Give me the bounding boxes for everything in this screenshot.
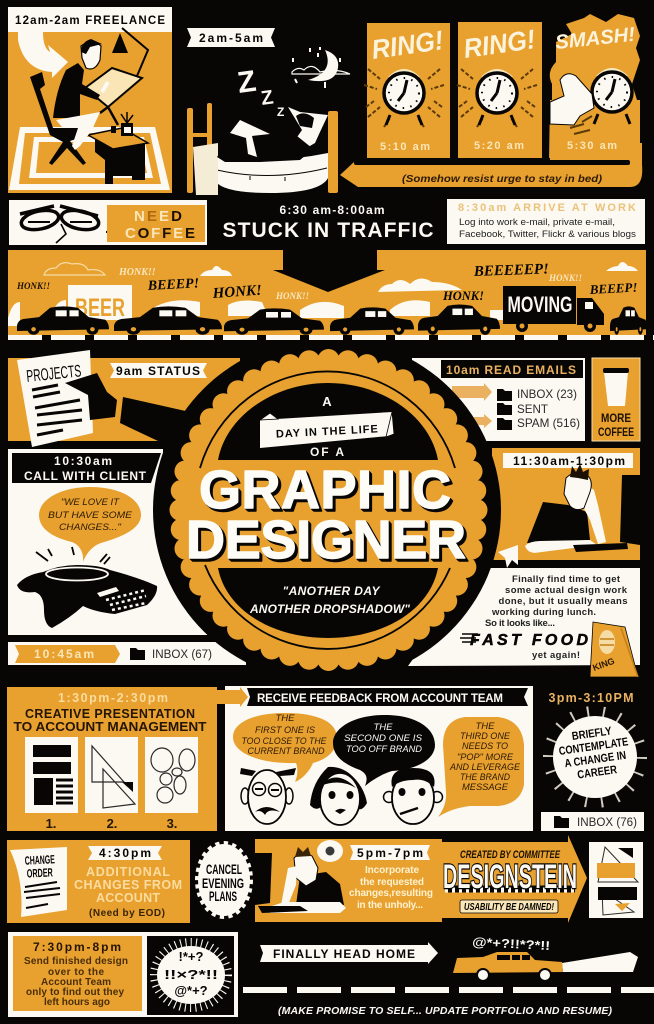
central badge (153, 338, 501, 682)
illustration: Zzz: Z (260, 86, 275, 110)
panel: need coffee: NEED (134, 208, 182, 225)
icon: alarm clock (457, 69, 537, 127)
icon: white up arrow (498, 545, 518, 568)
ribbon: day in the life: DAY IN THE LIFE (276, 423, 378, 441)
panel: traffic jam (8, 250, 647, 335)
icon: white flow arrow (18, 32, 68, 78)
panel: 1:30pm creative presentation: TO ACCOUNT MANAGEMENT (14, 720, 207, 734)
panel: 4:30pm additional changes: (Need by EOD) (89, 908, 165, 919)
bubble: first one: CURRENT BRAND (248, 746, 325, 757)
inbox list: INBOX (23) (517, 387, 577, 401)
illustration: car with headlight (453, 952, 638, 981)
option numbers: 3. (167, 816, 177, 831)
panel: inbox 76 (541, 812, 644, 831)
panel: 7:30pm send finished design: 7:30pm-8pm (33, 940, 121, 954)
panel: ring 5:20 am (457, 22, 542, 158)
text: fast food: FAST FOOD (470, 632, 588, 649)
honk sound words: HONK!! (118, 267, 156, 278)
tagline: ANOTHER DROPSHADOW" (249, 602, 410, 616)
text: incorporate changes: in the unholy... (357, 900, 423, 911)
arrows to folders (452, 383, 492, 428)
illustration: monitor (620, 475, 640, 545)
panel: 4:30pm additional changes: ADDITIONAL (86, 865, 170, 879)
panel: 7:30pm send finished design: Send finished design (24, 956, 128, 967)
speech bubble: client quote: BUT HAVE SOME (48, 510, 133, 521)
face: account man smoking (384, 768, 442, 824)
icon: change order paper (10, 847, 67, 917)
honk sound words: HONK! (442, 289, 484, 303)
illustration: Zzz: Z (277, 105, 284, 119)
panel: need coffee (9, 200, 207, 245)
honk sound words (16, 261, 638, 303)
burst: cancel evening plans (198, 844, 250, 916)
burst: cancel evening plans: CANCEL (206, 862, 242, 877)
honk sound words: HONK!! (16, 281, 50, 291)
panel: 4:30pm additional changes (7, 840, 190, 923)
bubble: first one: FIRST ONE IS (255, 725, 316, 736)
burst: contemplate career change (551, 714, 639, 800)
icon: hand and sleeve (65, 373, 190, 443)
title: of a: OF A (310, 445, 344, 459)
panel: 7:30pm send finished design: Account Team (41, 977, 111, 988)
panel: ring 5:10 am (364, 23, 450, 158)
illustration: moon and stars (292, 47, 350, 88)
panel: smash 5:30 am with arrow to bed (340, 14, 642, 187)
panel: 10:45am inbox: INBOX (67) (152, 649, 212, 661)
burst: cancel evening plans: EVENING (202, 876, 244, 891)
text: lunch description: So it looks like... (485, 618, 555, 629)
banner: finally head home (260, 942, 438, 964)
panel: ring 5:20 am: RING! (462, 24, 537, 64)
illustration: tired designer (258, 847, 346, 913)
illustration: monitor (255, 853, 272, 905)
honk sound words: HONK! (211, 283, 262, 302)
black arrow (273, 250, 385, 292)
bubble: second one: SECOND ONE IS (344, 733, 423, 744)
panel: 5pm-7pm designstein arrow: CREATED BY COMMITTEE (460, 849, 560, 861)
label: 2am-5am banner (187, 28, 275, 47)
panel: ring 5:20 am: 5:20 am (474, 140, 524, 152)
panel: 8:30am arrive at work: Log into work e-mail, private e-mail, (459, 217, 615, 228)
panel: ring 5:10 am: 5:10 am (380, 141, 430, 153)
background cars and beer sign: BEER (75, 294, 125, 322)
panel: curse burst (147, 936, 234, 1015)
option numbers (46, 816, 177, 831)
heading banner: RECEIVE FEEDBACK FROM ACCOUNT TEAM (257, 693, 503, 705)
label: time: 11:30am-1:30pm (513, 454, 625, 468)
ribbon: day in the life (260, 412, 394, 448)
tagline: "ANOTHER DAY (282, 584, 380, 598)
text: lunch description: some actual design work (505, 585, 628, 596)
honk sound words: HONK!! (275, 291, 309, 301)
icon: tired eyes (20, 206, 116, 243)
arrow into banner (217, 687, 248, 707)
background cars and beer sign (8, 285, 505, 326)
label: 2am-5am banner: 2am-5am (199, 31, 263, 45)
bubble: third one: THE BRAND (460, 772, 510, 783)
heading: 3pm-3:10pm: 3pm-3:10PM (548, 691, 634, 705)
caption: make promise: (MAKE PROMISE TO SELF... UPDATE PORTFOLIO AND RESUME) (278, 1005, 612, 1017)
icon: alarm clock (364, 69, 444, 127)
panel: smash 5:30 am with arrow to bed: 5:30 am (567, 140, 617, 152)
burst: contemplate career change: CONTEMPLATE (558, 736, 629, 758)
bubble: third one: "POP" MORE (457, 752, 514, 763)
illustration: designer eating at desk (525, 464, 628, 553)
icon: coffee cup (603, 368, 629, 406)
burst: contemplate career change: CAREER (577, 764, 618, 782)
icon: smashing hand (550, 74, 594, 125)
honk sound words: HONK!! (548, 273, 582, 283)
icon: paper bag (590, 622, 638, 677)
inbox list (497, 387, 580, 430)
text: incorporate changes: the requested (360, 877, 424, 888)
option numbers: 2. (107, 816, 117, 831)
panel: need coffee: COFFEE (125, 225, 195, 242)
illustration: Zzz: Z (235, 65, 258, 100)
black lower panel (218, 568, 438, 638)
label: 9am status: 9am STATUS (116, 364, 200, 378)
text: lunch description: working during lunch. (491, 607, 596, 618)
icon: change order paper: ORDER (26, 865, 53, 881)
road dashes (243, 987, 654, 993)
text: lunch description: yet again! (532, 650, 580, 661)
bubble: first one: TOO CLOSE TO THE (242, 736, 327, 747)
burst: contemplate career change: BRIEFLY (571, 725, 613, 743)
panel: 12am-2am freelance (8, 7, 172, 193)
panel: 1:30pm creative presentation: 1:30pm-2:30pm (58, 691, 168, 705)
honk sound words: BEEEP! (588, 280, 638, 297)
icon: paper bag: KING (591, 656, 616, 673)
label: 5pm-7pm: 5pm-7pm (357, 846, 423, 860)
heading: freelance: 12am-2am FREELANCE (15, 15, 165, 27)
text: lunch description: Finally find time to get (512, 574, 621, 585)
black upper panel (218, 383, 438, 460)
inbox list: SPAM (516) (517, 416, 580, 430)
banner: finally head home: FINALLY HEAD HOME (273, 947, 415, 961)
heading: stuck in traffic (222, 203, 434, 242)
panel: smash 5:30 am with arrow to bed: SMASH! (554, 24, 636, 54)
illustration: sleeping designer in bed (187, 103, 338, 195)
panel: 10am read emails: 10am READ EMAILS (446, 363, 576, 377)
panel: 7:30pm send finished design: only to find out they (26, 987, 124, 998)
panel: curse burst: !!×?*!! (164, 967, 218, 982)
clouds (44, 262, 638, 292)
text: incorporate changes: changes,resulting (349, 888, 433, 899)
text: incorporate changes: Incorporate (365, 865, 419, 876)
face: account man with glasses (240, 768, 296, 824)
panel: 1:30pm creative presentation (7, 687, 217, 831)
illustration: Zzz (235, 65, 284, 119)
panel: inbox 76: INBOX (76) (577, 817, 637, 829)
panel: receive feedback (217, 686, 533, 831)
burst: cancel evening plans: PLANS (209, 889, 237, 904)
moving truck: MOVING (508, 292, 572, 317)
title: designstein (443, 858, 577, 896)
panel: more coffee: COFFEE (598, 425, 634, 439)
banner: usability be damned: USABILITY BE DAMNED! (464, 902, 555, 913)
panel: 1:30pm creative presentation: CREATIVE PRESENTATION (25, 707, 195, 721)
heading: stuck in traffic: STUCK IN TRAFFIC (222, 219, 434, 242)
scalloped orange seal (180, 360, 476, 660)
panel: 5pm-7pm designstein arrow (255, 835, 587, 923)
panel: 9am status (8, 350, 240, 447)
heading: stuck in traffic: 6:30 am-8:00am (280, 203, 384, 217)
bubble: second one: TOO OFF BRAND (346, 744, 422, 755)
panel: 4:30pm additional changes: ACCOUNT (96, 891, 160, 905)
layout option 3 (145, 737, 198, 813)
illustration: designer at drawing board (53, 28, 148, 150)
icon: change order paper: CHANGE (24, 852, 55, 868)
icon: alarm clock (592, 68, 632, 124)
panel: 8:30am arrive at work: Facebook, Twitter, Flickr & various blogs (459, 229, 636, 240)
panel: 10am read emails (412, 358, 585, 441)
illustration: ink bottle (111, 112, 133, 136)
text: curses from car: @*+?!!*?*!! (472, 935, 551, 953)
panel: 10:45am inbox: 10:45am (34, 647, 94, 661)
text: lunch description: done, but it usually means (498, 596, 628, 607)
rug (9, 127, 170, 190)
illustration: desk (88, 128, 148, 184)
panel: 8:30am arrive at work (447, 199, 645, 244)
panel: 7:30pm send finished design: over to the (48, 967, 104, 978)
panel: 10:30am call with client: 10:30am (54, 454, 112, 468)
panel: more coffee (592, 358, 640, 441)
panel: designstein mashup layout (589, 842, 643, 918)
inbox list: SENT (517, 402, 549, 416)
title: graphic: GRAPHIC (199, 460, 451, 520)
layout option 1 (25, 737, 78, 813)
label: 4:30pm: 4:30pm (99, 846, 151, 860)
option numbers: 1. (46, 816, 56, 831)
bubble: third one: NEEDS TO (462, 741, 509, 752)
title: designer: DESIGNER (186, 510, 466, 570)
bubble: third one: THE (476, 721, 495, 732)
bubble: first one (233, 713, 337, 782)
illustration: chair (30, 72, 86, 165)
panel: more coffee: MORE (601, 411, 631, 425)
heading banner (247, 688, 528, 706)
bubble: third one: THIRD ONE (460, 731, 511, 742)
caption: resist urge: (Somehow resist urge to stay in bed) (402, 174, 603, 185)
burst: contemplate career change: A CHANGE IN (564, 750, 627, 770)
car row (17, 304, 647, 335)
panel: 10:30am call with client (8, 449, 212, 635)
panel: 7:30pm send finished design (8, 932, 238, 1017)
panel: 8:30am arrive at work: 8:30am ARRIVE AT WORK (458, 202, 636, 214)
panel: 4:30pm additional changes: CHANGES FROM (74, 878, 182, 892)
bubble: third one: AND LEVERAGE (449, 762, 521, 773)
speech bubble: client quote: "WE LOVE IT (61, 497, 120, 508)
inner ring arcs (200, 371, 455, 649)
panel: 7:30pm send finished design: left hours ago (44, 997, 110, 1008)
tagline (249, 584, 410, 616)
layout option 2 (85, 737, 138, 813)
panel: curse burst: @*+? (174, 983, 208, 998)
banner: usability be damned (460, 900, 558, 913)
bubble: first one: THE (276, 713, 295, 724)
text: lunch description (485, 574, 628, 661)
speech bubble: client quote (39, 487, 141, 562)
honk sound words: BEEEEEP! (473, 261, 549, 280)
text: incorporate changes (349, 865, 433, 911)
bubble: third one: MESSAGE (462, 782, 509, 793)
bubble: second one: THE (374, 722, 393, 733)
icon: projects paper (17, 350, 93, 447)
panel: 11:30am-1:30pm lunch (408, 448, 640, 677)
panel: 10:45am inbox (8, 642, 246, 665)
panel: curse burst: !*+? (179, 949, 204, 964)
honk sound words: BEEEP! (146, 276, 199, 294)
bubble: third one (438, 717, 524, 817)
panel: 10:30am call with client: CALL WITH CLIENT (24, 469, 147, 483)
icon: thought bubble (317, 840, 343, 862)
bubble: second one (333, 715, 435, 786)
title: a: A (322, 394, 332, 409)
road dashes under traffic (8, 335, 654, 340)
icon: projects paper: PROJECTS (25, 361, 82, 386)
icon: conference phone (17, 547, 157, 628)
moving truck (503, 286, 604, 332)
speech bubble: client quote: CHANGES..." (59, 522, 122, 533)
panel: ring 5:10 am: RING! (370, 25, 445, 65)
face: account woman (310, 767, 367, 825)
black outline (153, 338, 501, 682)
